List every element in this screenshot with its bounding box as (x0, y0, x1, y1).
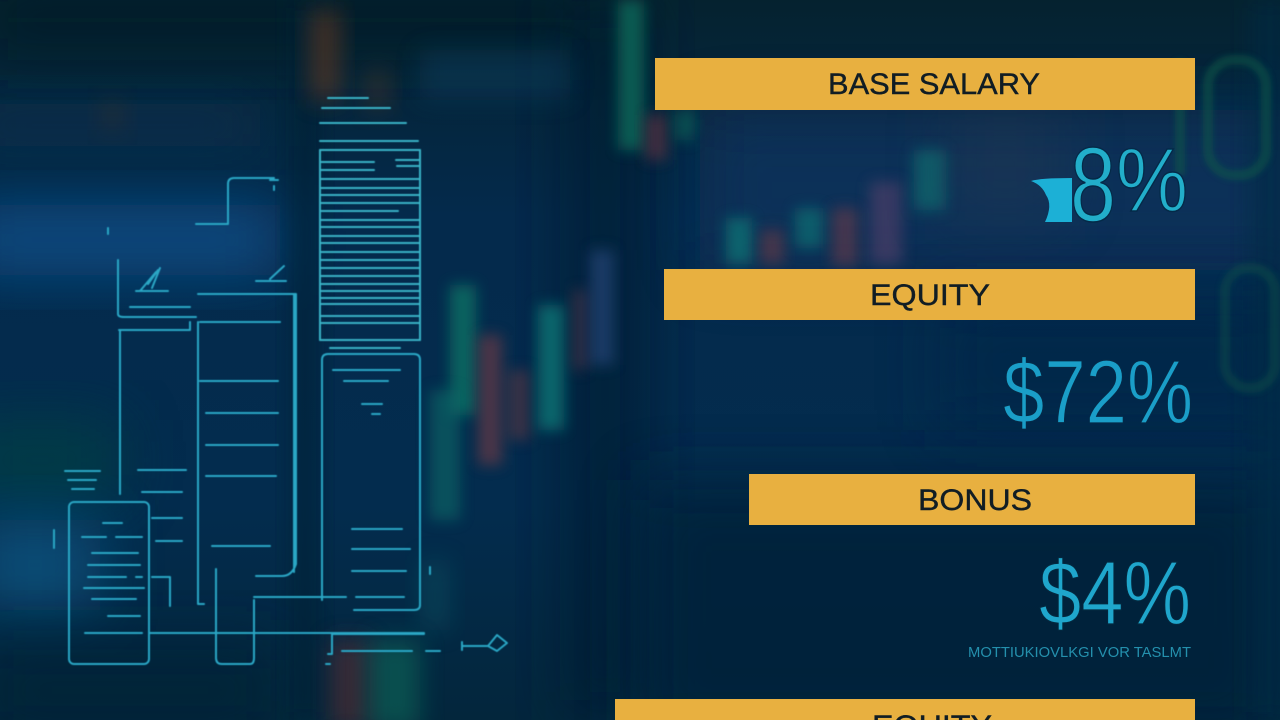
caption: MOTTIUKIOVLKGI VOR TASLMT (968, 644, 1191, 661)
value: 72 percent: $72% (1003, 343, 1193, 443)
label: bonus: BONUS (918, 484, 1032, 517)
tall striped bar (320, 98, 420, 348)
base connector (149, 569, 424, 664)
label: equity: EQUITY (870, 279, 990, 312)
value: 8 percent: % (1116, 131, 1188, 231)
node: diamond (462, 635, 507, 651)
label: base salary: BASE SALARY (828, 68, 1040, 101)
value: 8 percent (1031, 126, 1188, 244)
document card (54, 471, 149, 664)
small stepped connector (108, 178, 278, 234)
bar: equity lower (615, 699, 1195, 720)
bar: equity (664, 269, 1195, 320)
icon: bag fragment (1031, 178, 1072, 222)
value: 8 percent: 8 (1070, 126, 1116, 244)
middle bar (198, 294, 296, 604)
bar: base salary (655, 58, 1195, 110)
left bar (118, 260, 196, 606)
diagram: wireframe bars (54, 98, 507, 664)
bar: bonus (749, 474, 1195, 525)
glyphs above bars (136, 266, 286, 291)
value: 4 percent: $4% (1039, 544, 1191, 644)
tall outline bar (254, 354, 420, 610)
